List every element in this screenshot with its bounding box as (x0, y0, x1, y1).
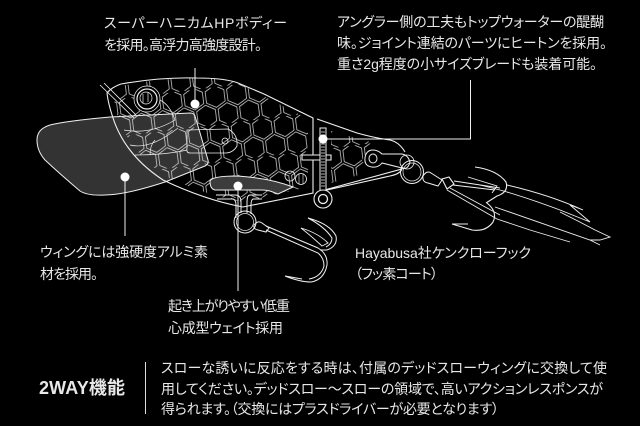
rear body outline (317, 119, 405, 192)
text: honeycomb body (104, 15, 287, 53)
feather (500, 185, 590, 222)
joint pin (302, 155, 331, 160)
text: 2WAY description (161, 360, 607, 417)
text: 2WAY description: 用してください。デッドスロー〜スローの領域で、高いアクションレスポンスが (161, 381, 603, 397)
internal head lines (124, 100, 187, 155)
divider (144, 362, 146, 414)
text: wing material: ウィングには強硬度アルミ素 (40, 244, 208, 260)
text: weight: 心成型ウェイト採用 (168, 320, 283, 336)
callout: wing (120, 172, 130, 236)
text: hook (355, 245, 531, 282)
weight keel (216, 195, 262, 218)
text: hook: Hayabusa社ケンクローフック (355, 245, 531, 261)
front treble hook (254, 218, 336, 282)
rear honeycomb (331, 131, 370, 183)
wing mount plate (187, 129, 237, 153)
body front outline (107, 78, 313, 207)
eye (134, 86, 160, 112)
belly weight (210, 176, 293, 194)
lure illustration (37, 70, 610, 282)
rear split ring (400, 160, 424, 184)
heading: 2WAY: 2WAY機能 (39, 378, 125, 398)
rear eyelet (365, 150, 410, 168)
tow eye wire (100, 83, 136, 118)
rear treble hook (423, 167, 610, 245)
front split ring (234, 211, 256, 233)
text: angler details: 重さ2g程度の小サイズブレードも装着可能。 (337, 56, 597, 72)
text: honeycomb body: スーパーハニカムHPボディー (104, 15, 287, 31)
text: wing material: 材を採用。 (40, 266, 98, 282)
text: angler details (337, 14, 607, 72)
honeycomb (114, 78, 308, 202)
text: 2WAY description: スローな誘いに反応をする時は、付属のデッドスローウィングに交換して使 (161, 360, 607, 376)
text: weight: 起き上がりやすい低重 (168, 298, 290, 314)
text: angler details: アングラー側の工夫もトップウォーターの醍醐 (337, 14, 604, 30)
text: honeycomb body: を採用。高浮力高強度設計。 (104, 37, 262, 53)
tail body circles (285, 171, 295, 181)
text: angler details: 味。ジョイント連結のパーツにヒートンを採用。 (337, 35, 607, 51)
callout: body material (190, 68, 200, 108)
text: weight (168, 298, 290, 336)
text: 2WAY description: 得られます。（交換にはプラスドライバーが必要となります） (161, 401, 499, 417)
callout: angler details (318, 80, 470, 144)
bottom ring (314, 190, 332, 208)
text: hook: （フッ素コート） (355, 266, 438, 282)
text: wing material (40, 244, 208, 282)
joint screw (320, 128, 326, 191)
lip wing (37, 113, 208, 195)
callout: weight (234, 182, 242, 291)
